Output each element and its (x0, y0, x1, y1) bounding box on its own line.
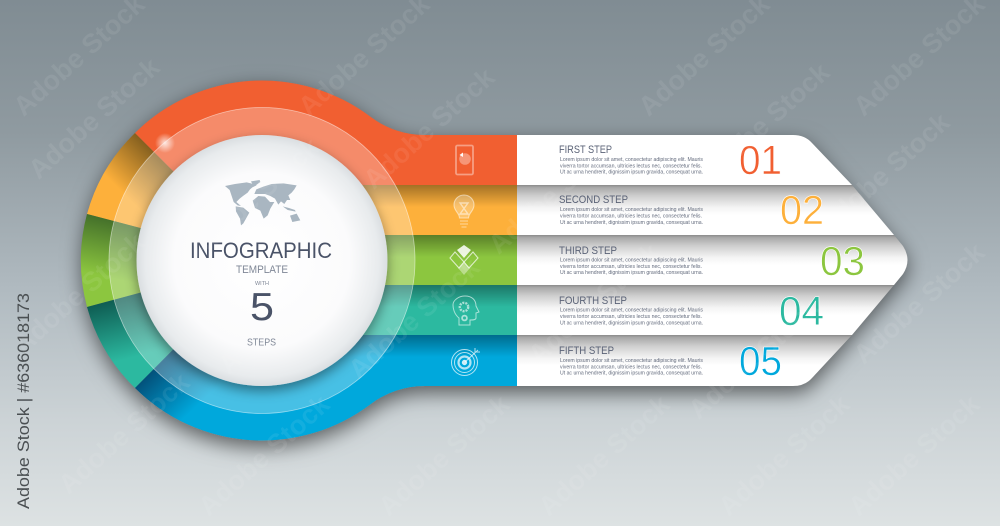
step 1 text: Ut ac urna hendrerit, dignissim ipsum gravida, consequat urna. (560, 170, 703, 176)
watermarks: Adobe Stock (843, 388, 986, 522)
main key-shaped diagram (81, 80, 907, 441)
icon: head with gears (453, 296, 479, 325)
watermarks: Adobe Stock (523, 236, 666, 370)
step 3 text: Lorem ipsum dolor sit amet, consectetur adipiscing elit. Mauris (560, 258, 703, 264)
watermarks: Adobe Stock (343, 251, 486, 385)
icon: phone with chart (456, 146, 473, 174)
segment: step 4 teal (87, 260, 262, 388)
subtitle: STEPS: STEPS (247, 336, 276, 348)
segment: step 2 yellow (87, 133, 262, 260)
centre disc (136, 135, 388, 386)
step 1 number: 01 (739, 137, 782, 183)
watermarks: Adobe Stock (713, 388, 856, 522)
title: INFOGRAPHIC: INFOGRAPHIC (190, 238, 332, 263)
step 5 text: FIFTH STEP (559, 345, 614, 357)
band: step 3 green (262, 235, 517, 285)
step 3 number: 03 (820, 238, 865, 284)
watermarks: Adobe Stock (373, 388, 516, 522)
white row 3 (517, 235, 908, 285)
step 5 number: 05 (739, 338, 782, 384)
watermarks: Adobe Stock (533, 388, 676, 522)
watermarks: Adobe Stock (213, 246, 356, 380)
step 4 text: FOURTH STEP (559, 295, 627, 307)
segment and band: step 1 red (135, 80, 517, 260)
icon: world map (225, 180, 300, 225)
step 4 number: 04 (779, 288, 824, 334)
watermarks: Adobe Stock (183, 131, 326, 265)
white row 1 (517, 135, 852, 185)
white row 2 (517, 185, 894, 235)
step 4 text: Ut ac urna hendrerit, dignissim ipsum gravida, consequat urna. (560, 320, 703, 326)
silhouette shadow (82, 80, 907, 441)
icon: puzzle diamond (450, 245, 478, 275)
watermarks: Adobe Stock (683, 291, 826, 425)
segment and band: step 5 blue (135, 260, 517, 441)
step 1 text: Lorem ipsum dolor sit amet, consectetur adipiscing elit. Mauris (560, 157, 703, 163)
step 5 text (559, 345, 703, 377)
step 4 text: viverra tortor accumsan, ultricies lectus nec, consectetur felis. (560, 314, 702, 320)
watermarks: Adobe Stock (8, 226, 151, 360)
subtitle: WITH: WITH (255, 281, 269, 287)
step 5 text: viverra tortor accumsan, ultricies lectus nec, consectetur felis. (560, 364, 702, 370)
step 5 text: Lorem ipsum dolor sit amet, consectetur adipiscing elit. Mauris (560, 358, 703, 364)
stock id label: Adobe Stock | #636018173 (14, 293, 33, 509)
watermarks: Adobe Stock (53, 366, 196, 500)
step 4 text: Lorem ipsum dolor sit amet, consectetur adipiscing elit. Mauris (560, 308, 703, 314)
step 3 text: Ut ac urna hendrerit, dignissim ipsum gravida, consequat urna. (560, 270, 703, 276)
step 5 text: Ut ac urna hendrerit, dignissim ipsum gravida, consequat urna. (560, 371, 703, 377)
band shading (262, 185, 517, 357)
step 2 text: SECOND STEP (559, 194, 628, 206)
step 3 text: THIRD STEP (559, 245, 617, 257)
step 2 text: Ut ac urna hendrerit, dignissim ipsum gravida, consequat urna. (560, 220, 703, 226)
subtitle: TEMPLATE: TEMPLATE (236, 264, 288, 276)
watermarks: Adobe Stock (483, 126, 626, 260)
big number 5: 5 (250, 286, 274, 329)
step 2 text (559, 194, 703, 226)
watermarks: Adobe Stock (23, 51, 166, 185)
white row 5 (517, 335, 852, 386)
watermarks: Adobe Stock (358, 61, 501, 195)
step 2 text: viverra tortor accumsan, ultricies lectus nec, consectetur felis. (560, 214, 702, 220)
step 1 text: viverra tortor accumsan, ultricies lectus nec, consectetur felis. (560, 163, 702, 169)
watermarks: Adobe Stock (193, 388, 336, 522)
glass ring (109, 108, 415, 414)
icon: target with arrow (452, 348, 480, 376)
band: step 2 yellow (262, 185, 517, 235)
step 1 text: FIRST STEP (559, 144, 612, 156)
step 1 text (559, 144, 703, 176)
step 4 text (559, 295, 703, 326)
watermarks: Adobe Stock (693, 56, 836, 190)
segment: step 3 green (81, 214, 262, 307)
icon: light bulb with hourglass (454, 195, 474, 227)
step 3 text (559, 245, 703, 276)
watermarks: Adobe Stock (813, 106, 956, 240)
white row 4 (517, 285, 894, 335)
step 2 number: 02 (780, 187, 824, 233)
step 2 text: Lorem ipsum dolor sit amet, consectetur adipiscing elit. Mauris (560, 207, 703, 213)
watermarks: Adobe Stock (848, 236, 991, 370)
band: step 4 teal (262, 285, 517, 335)
step 3 text: viverra tortor accumsan, ultricies lectus nec, consectetur felis. (560, 264, 702, 270)
